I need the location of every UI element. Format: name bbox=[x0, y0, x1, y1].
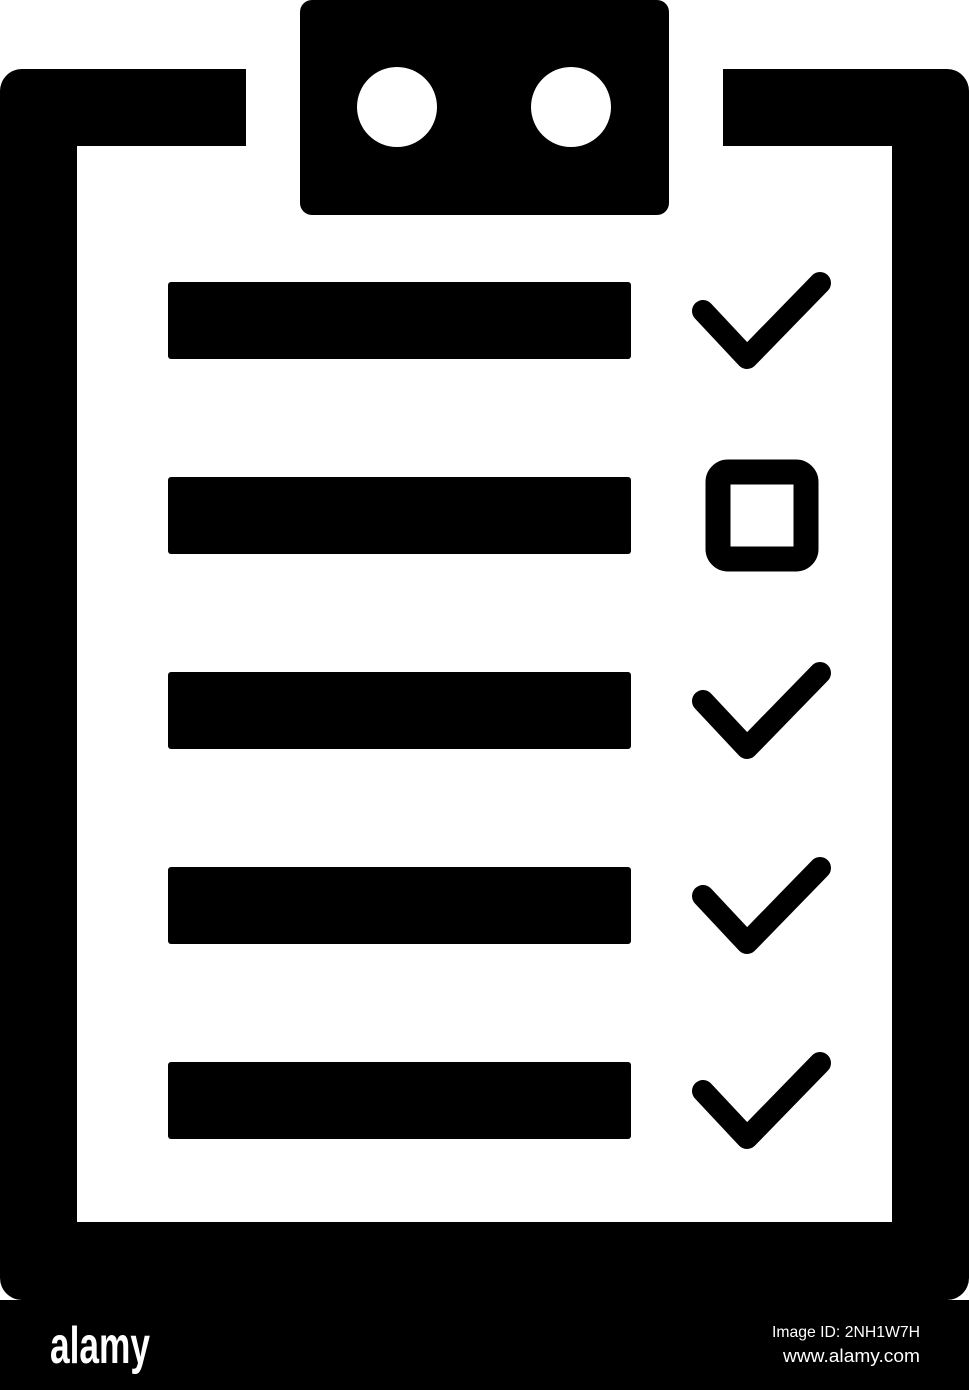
footer bar bbox=[0, 1300, 969, 1390]
website: www.alamy.com bbox=[782, 1346, 920, 1366]
alamy logo: alamy bbox=[50, 1317, 150, 1375]
item 3: bar with check bbox=[168, 672, 820, 749]
clipboard clip bbox=[300, 0, 669, 215]
item 1: bar with check bbox=[168, 282, 820, 359]
item 2: bar with empty checkbox bbox=[168, 472, 806, 559]
item 4: bar with check bbox=[168, 867, 820, 944]
image id: Image ID: 2NH1W7H bbox=[772, 1324, 920, 1341]
item 5: bar with check bbox=[168, 1062, 820, 1139]
checklist items bbox=[168, 282, 820, 1139]
